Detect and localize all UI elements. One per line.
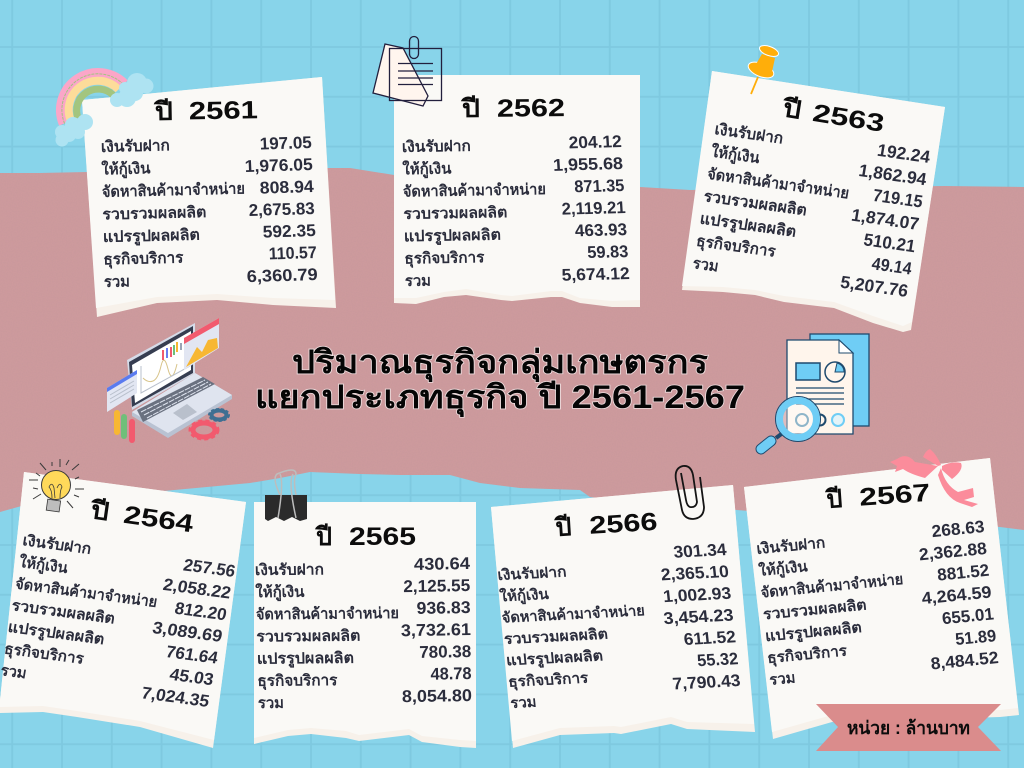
heading: 2562: 2562 xyxy=(497,94,565,123)
labels: 2566: รวบรวมผลผลิต xyxy=(503,626,609,648)
labels: 2561: แปรรูปผลผลิต xyxy=(103,225,200,247)
values: 2566 xyxy=(656,540,742,694)
values: 2562 xyxy=(551,132,630,285)
values: 2562: 1,955.68 xyxy=(552,154,624,175)
labels: 2567 xyxy=(756,527,913,689)
labels: 2564: ธุรกิจบริการ xyxy=(3,640,86,669)
icon: light bulb xyxy=(29,459,84,512)
values: 2563: 510.21 xyxy=(862,229,917,256)
values: 2563 xyxy=(839,138,932,301)
labels: 2565: ให้กู้เงิน xyxy=(255,582,305,602)
values: 2565: 430.64 xyxy=(414,554,471,574)
icon: rainbow xyxy=(61,73,124,124)
heading: 2561: ปี xyxy=(153,98,173,126)
values: 2567: 2,362.88 xyxy=(918,539,988,564)
values: 2563: 1,874.07 xyxy=(850,205,921,234)
labels: 2563: ธุรกิจบริการ xyxy=(695,232,778,262)
values: 2566: 7,790.43 xyxy=(671,671,741,693)
values: 2561: 110.57 xyxy=(268,243,317,263)
panel: year 2566 xyxy=(491,485,755,748)
values: 2565: 48.78 xyxy=(430,664,472,684)
values: 2561: 1,976.05 xyxy=(244,155,313,176)
labels: 2563: แปรรูปผลผลิต xyxy=(698,209,798,242)
values: 2565: 2,125.55 xyxy=(403,576,470,596)
values: 2563: 1,862.94 xyxy=(857,160,928,189)
labels: 2565: จัดหาสินค้ามาจำหน่าย xyxy=(256,604,399,623)
labels: 2562: ธุรกิจบริการ xyxy=(404,248,486,269)
heading: 2566 xyxy=(553,508,658,542)
labels: 2562: รวบรวมผลผลิต xyxy=(403,203,508,223)
heading: 2566: 2566 xyxy=(589,508,658,540)
values: 2565: 8,054.80 xyxy=(402,686,472,706)
labels: 2564: ให้กู้เงิน xyxy=(17,553,70,578)
values: 2562: 2,119.21 xyxy=(561,198,626,219)
heading: 2567: ปี xyxy=(824,485,843,514)
panel: year 2565 xyxy=(254,502,476,748)
values: 2562: 871.35 xyxy=(574,176,625,196)
values: 2563: 5,207.76 xyxy=(839,272,910,301)
values: 2563: 719.15 xyxy=(871,185,925,212)
heading: 2563: 2563 xyxy=(811,99,886,138)
values: 2562: 59.83 xyxy=(587,242,629,262)
values: 2564: 257.56 xyxy=(182,555,237,581)
callout: unit ribbon: หน่วย : ล้านบาท xyxy=(847,718,970,738)
values: 2565: 936.83 xyxy=(416,598,471,618)
values: 2563: 49.14 xyxy=(870,253,914,279)
labels: 2562: ให้กู้เงิน xyxy=(402,158,452,179)
values: 2566: 611.52 xyxy=(683,627,737,649)
labels: 2565: แปรรูปผลผลิต xyxy=(257,649,354,669)
heading: 2567 xyxy=(824,479,931,514)
values: 2567: 655.01 xyxy=(941,604,995,628)
labels: 2567: รวบรวมผลผลิต xyxy=(762,597,867,623)
labels: 2566: เงินรับฝาก xyxy=(497,564,567,584)
labels: 2567: รวม xyxy=(769,670,796,689)
values: 2562: 463.93 xyxy=(574,220,628,240)
values: 2565: 3,732.61 xyxy=(401,620,471,640)
labels: 2563: เงินรับฝาก xyxy=(713,120,785,148)
values: 2561: 2,675.83 xyxy=(248,199,315,220)
torn pink paper band xyxy=(0,168,1024,530)
heading: 2564: 2564 xyxy=(122,501,195,538)
icon: orange push pin xyxy=(746,43,780,94)
labels: 2561: ธุรกิจบริการ xyxy=(103,248,184,270)
icon: binder clip xyxy=(265,470,307,521)
labels: 2562: แปรรูปผลผลิต xyxy=(404,226,501,246)
icon: laptop with charts xyxy=(107,318,232,443)
values: 2565: 780.38 xyxy=(419,642,471,662)
panel: year 2564 xyxy=(0,472,246,748)
values: 2564: 3,089.69 xyxy=(151,618,224,646)
heading: 2562 xyxy=(460,94,565,123)
labels: 2561 xyxy=(101,134,247,291)
labels: 2562: เงินรับฝาก xyxy=(402,137,471,156)
labels: 2564: แปรรูปผลผลิต xyxy=(6,618,106,649)
icon: gears xyxy=(190,409,229,439)
heading: main title: ปริมาณธุรกิจกลุ่มเกษตรกร xyxy=(292,344,708,383)
labels: 2563: ให้กู้เงิน xyxy=(710,141,762,168)
values: 2567: 881.52 xyxy=(936,561,990,585)
labels: 2566: ให้กู้เงิน xyxy=(499,585,550,606)
values: 2566: 1,002.93 xyxy=(662,584,732,606)
labels: 2565: รวบรวมผลผลิต xyxy=(256,627,361,646)
values: 2567 xyxy=(914,517,999,674)
values: 2567: 4,264.59 xyxy=(921,583,992,608)
values: 2561: 592.35 xyxy=(262,221,316,242)
values: 2564: 45.03 xyxy=(168,665,215,689)
labels: 2566 xyxy=(497,560,654,712)
labels: 2561: ให้กู้เงิน xyxy=(101,158,151,180)
labels: 2564: จัดหาสินค้ามาจำหน่าย xyxy=(14,575,159,611)
labels: 2565: ธุรกิจบริการ xyxy=(257,671,339,691)
values: 2565 xyxy=(400,554,473,706)
heading: 2565: 2565 xyxy=(349,523,416,551)
icon: paperclip xyxy=(676,466,704,519)
callout: unit ribbon xyxy=(816,704,1001,751)
labels: 2567: ธุรกิจบริการ xyxy=(767,642,849,667)
labels: 2565: เงินรับฝาก xyxy=(255,560,324,579)
labels: 2567: จัดหาสินค้ามาจำหน่าย xyxy=(760,571,904,602)
values: 2561: 6,360.79 xyxy=(246,265,318,286)
panel: year 2561 xyxy=(82,77,336,317)
labels: 2563: รวม xyxy=(691,255,720,276)
heading: 2564: ปี xyxy=(87,496,111,526)
icon: clouds xyxy=(55,73,154,146)
labels: 2563: จัดหาสินค้ามาจำหน่าย xyxy=(706,165,851,203)
labels: 2566: แปรรูปผลผลิต xyxy=(505,648,604,670)
heading: 2563 xyxy=(779,94,886,138)
labels: 2561: เงินรับฝาก xyxy=(101,136,170,156)
panel: year 2562 xyxy=(394,75,640,307)
values: 2564: 761.64 xyxy=(164,642,220,668)
heading: 2562: ปี xyxy=(460,95,480,123)
icon: report with magnifier xyxy=(761,334,869,449)
heading: 2566: ปี xyxy=(553,513,572,542)
labels: 2564: รวม xyxy=(0,662,28,682)
labels: 2564: รวบรวมผลผลิต xyxy=(10,596,116,628)
heading: main title xyxy=(255,344,745,418)
panel: year 2567 xyxy=(744,458,1019,739)
values: 2561 xyxy=(240,133,319,286)
values: 2567: 268.63 xyxy=(931,517,985,541)
labels: 2563 xyxy=(691,120,858,292)
icon: blue browser window xyxy=(107,370,137,412)
labels: 2563: รวบรวมผลผลิต xyxy=(702,187,808,219)
heading: 2561: 2561 xyxy=(189,96,258,125)
labels: 2562: รวม xyxy=(405,272,431,290)
heading: main title: แยกประเภทธุรกิจ ปี 2561-2567 xyxy=(255,379,745,418)
labels: 2566: รวม xyxy=(510,695,537,712)
heading: 2561 xyxy=(153,96,258,126)
icon: pink ribbon bow xyxy=(890,449,978,507)
icon: bar cylinders xyxy=(114,410,135,443)
labels: 2564 xyxy=(0,531,166,698)
labels: 2567: ให้กู้เงิน xyxy=(758,557,809,581)
heading: 2563: ปี xyxy=(779,94,803,125)
values: 2566: 55.32 xyxy=(696,649,739,670)
labels: 2565 xyxy=(255,560,401,712)
values: 2564: 7,024.35 xyxy=(140,683,211,711)
heading: 2565: ปี xyxy=(314,523,332,551)
values: 2564: 812.20 xyxy=(173,599,228,624)
panel: year 2563 xyxy=(682,71,945,332)
values: 2562: 204.12 xyxy=(568,132,622,152)
labels: 2561: จัดหาสินค้ามาจำหน่าย xyxy=(102,179,245,201)
values: 2566: 3,454.23 xyxy=(663,606,734,628)
labels: 2561: รวบรวมผลผลิต xyxy=(102,203,207,224)
values: 2564 xyxy=(138,553,237,711)
values: 2566: 2,365.10 xyxy=(660,562,730,584)
labels: 2562: จัดหาสินค้ามาจำหน่าย xyxy=(403,180,546,201)
values: 2567: 51.89 xyxy=(954,626,997,649)
labels: 2566: ธุรกิจบริการ xyxy=(507,670,589,691)
labels: 2567: เงินรับฝาก xyxy=(756,534,826,558)
values: 2561: 808.94 xyxy=(259,177,315,198)
values: 2566: 301.34 xyxy=(672,540,728,562)
values: 2567: 8,484.52 xyxy=(930,648,999,673)
heading: 2565 xyxy=(314,523,416,551)
labels: 2566: จัดหาสินค้ามาจำหน่าย xyxy=(501,602,646,627)
values: 2561: 197.05 xyxy=(259,133,312,154)
values: 2563: 192.24 xyxy=(876,140,932,167)
labels: 2562 xyxy=(402,135,548,290)
values: 2562: 5,674.12 xyxy=(561,264,630,285)
labels: 2564: เงินรับฝาก xyxy=(21,531,93,558)
icon: sticky notes with clip xyxy=(373,37,442,106)
values: 2564: 2,058.22 xyxy=(161,575,233,603)
heading: 2564 xyxy=(87,496,195,538)
labels: 2561: รวม xyxy=(104,273,130,291)
labels: 2567: แปรรูปผลผลิต xyxy=(764,619,863,646)
labels: 2565: รวม xyxy=(258,695,284,712)
heading: 2567: 2567 xyxy=(858,479,931,512)
icon: window with area chart xyxy=(184,318,219,370)
